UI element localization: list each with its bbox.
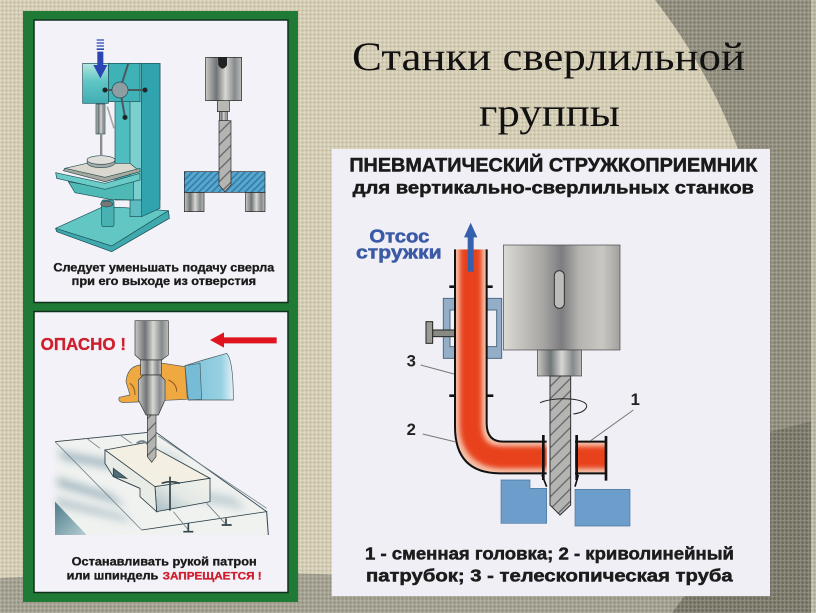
heading: danger: ОПАСНО !	[41, 334, 126, 354]
text: danger caption: ЗАПРЕЩАЕТСЯ !	[163, 570, 262, 582]
panel: danger illustration	[41, 321, 277, 582]
title	[352, 34, 745, 135]
arrow: suction direction	[464, 223, 477, 272]
arrow: rotation	[540, 399, 587, 414]
part labels: 2	[407, 420, 416, 439]
panel: safety poster frame	[23, 11, 298, 602]
icon: workpiece fixtures	[501, 480, 630, 526]
label: chip suction: Отсос	[369, 226, 429, 247]
icon: orange suction pipe	[449, 237, 615, 487]
part labels: 1	[631, 390, 640, 409]
text: danger caption	[67, 556, 262, 582]
heading: chip collector	[349, 155, 758, 197]
arrow: downward feed	[93, 39, 107, 78]
label: chip suction	[356, 226, 442, 262]
title: группы	[479, 90, 620, 135]
panel: pneumatic chip collector	[332, 149, 770, 596]
icon: sleeve and hand	[119, 353, 233, 403]
text: feed caption	[53, 262, 275, 288]
heading: chip collector: для вертикально-сверлильных станков	[353, 177, 754, 197]
panel: feed reduction illustration	[53, 39, 275, 288]
icon: bracket and clamp bolt	[426, 298, 502, 358]
icon: grey spindle head	[503, 245, 620, 376]
part labels	[407, 352, 640, 442]
text: danger caption: Останавливать рукой патрон	[72, 556, 257, 569]
icon: drill chuck	[135, 321, 168, 462]
label: chip suction: стружки	[356, 241, 442, 262]
icon: drill press	[56, 63, 169, 252]
text: legend	[365, 543, 734, 586]
text: feed caption: Следует уменьшать подачу сверла	[53, 262, 275, 275]
icon: table with workpiece	[55, 432, 268, 535]
title: Станки сверлильной	[352, 34, 745, 79]
text: feed caption: при его выходе из отверстия	[72, 275, 256, 288]
text: legend: 1 - сменная головка; 2 - криволинейный	[365, 543, 734, 563]
heading: chip collector: ПНЕВМАТИЧЕСКИЙ СТРУЖКОПРИЕМНИК	[349, 155, 758, 177]
part labels: 3	[407, 352, 416, 371]
icon: drill bit	[550, 376, 571, 515]
text: danger caption: или шпиндель	[67, 569, 158, 582]
text: legend: патрубок; 3 - телескопическая труба	[366, 566, 733, 586]
arrow: red pointer	[210, 332, 277, 348]
icon: drill through workpiece	[184, 57, 265, 212]
